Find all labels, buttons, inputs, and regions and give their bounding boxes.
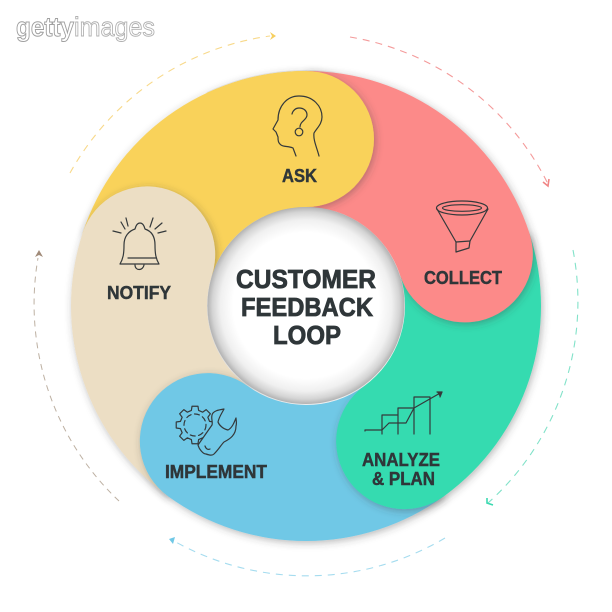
title: FEEDBACK	[241, 292, 373, 322]
label: collect: COLLECT	[424, 268, 502, 288]
title: CUSTOMER	[236, 264, 376, 294]
label: analyze and plan	[362, 450, 440, 489]
label: analyze and plan: ANALYZE	[362, 450, 440, 470]
arrow: red dashed arc	[350, 37, 549, 186]
title: LOOP	[273, 320, 341, 350]
icon: growth chart	[365, 392, 442, 434]
panel: notify segment	[13, 169, 298, 509]
arrow: yellow dashed arc	[70, 32, 276, 173]
label: analyze and plan: & PLAN	[372, 469, 435, 489]
icon: bell	[113, 218, 166, 270]
panel: ask segment base	[82, 71, 374, 275]
arrow: beige dashed arc	[34, 250, 119, 501]
arrow: green dashed arc	[487, 250, 578, 505]
panel: implement segment	[113, 291, 469, 612]
title	[236, 264, 376, 350]
center circle	[208, 207, 404, 404]
panel: ask segment head	[206, 70, 380, 216]
icon: head with question mark	[273, 96, 322, 156]
icon: gear and wrench	[176, 406, 236, 455]
panel: analyze and plan segment	[269, 199, 612, 536]
watermark: gettyimages logo: getty	[16, 12, 74, 42]
label: implement: IMPLEMENT	[165, 462, 267, 482]
watermark: gettyimages logo: images	[74, 12, 155, 42]
label: ask: ASK	[282, 166, 317, 186]
arrow: blue dashed arc	[169, 537, 445, 576]
watermark: gettyimages logo	[16, 12, 155, 42]
panel: collect segment	[266, 21, 551, 361]
icon: funnel	[436, 201, 488, 252]
label: notify: NOTIFY	[107, 283, 171, 303]
